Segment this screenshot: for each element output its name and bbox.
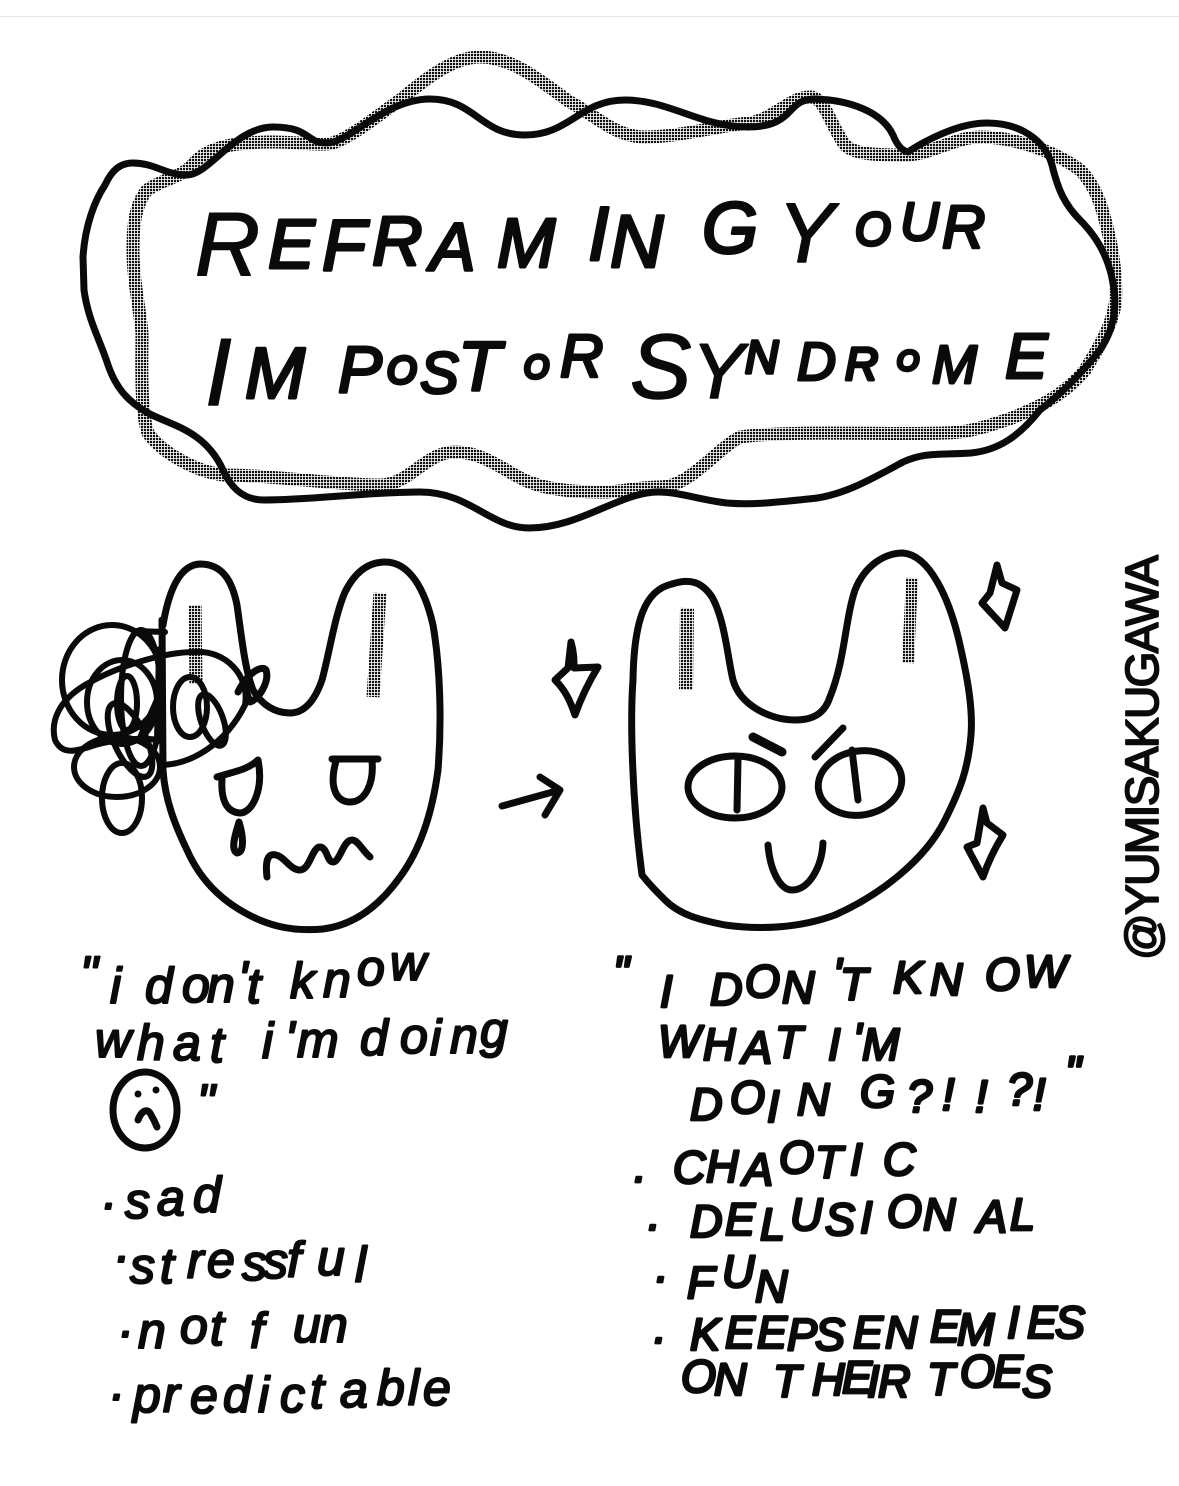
arrow between characters: [502, 777, 560, 815]
left list: ·not fun: [117, 1297, 348, 1359]
right quote: ": [613, 947, 631, 998]
left quote: [80, 935, 508, 1148]
left pupil: [737, 760, 738, 810]
hair scribble: [54, 625, 267, 833]
right list: ON THEIR TOES: [681, 1346, 1052, 1407]
title banner: cloud outlines with title: P: [338, 332, 382, 406]
head outline: [632, 553, 971, 928]
title text: N: [610, 200, 664, 283]
title banner: cloud outlines with title: N: [745, 331, 779, 383]
title text: R: [942, 194, 985, 261]
right quote: DOING?!!?!": [690, 1047, 1083, 1132]
right list: .CHAOTIC: [634, 1132, 916, 1195]
right list: .KEEPS ENEMIES: [654, 1297, 1085, 1360]
title banner: cloud outlines with title: [83, 57, 1116, 528]
sad face icon: [113, 1072, 177, 1148]
halftone cloud outline: [133, 57, 1116, 492]
right eyebrow: [815, 728, 843, 757]
left eyebrow: [753, 737, 782, 752]
title banner: cloud outlines with title: S: [630, 316, 691, 418]
left list: ·stressful: [113, 1228, 368, 1294]
title text: E: [268, 205, 316, 283]
ear shading: [686, 608, 687, 690]
wavy mouth: [266, 840, 370, 877]
right pupil: [852, 750, 858, 800]
right list: .FUN: [656, 1241, 788, 1312]
title text: M: [497, 204, 556, 282]
sparkle: bottom right: [967, 808, 1003, 877]
left list: ·predictable: [108, 1360, 451, 1424]
credit: vertical handle: @YUMISAKUGAWA: [1116, 555, 1168, 960]
right character: confident face: [632, 553, 971, 928]
left character: stressed face with scribble: [54, 562, 440, 930]
ear shading: [195, 605, 196, 684]
left list: [100, 1167, 451, 1424]
right list: [634, 1132, 1085, 1407]
solid cloud outline: [83, 99, 1115, 528]
title banner: cloud outlines with title: D: [797, 332, 836, 392]
left quote: what i'm doing: [95, 1002, 508, 1073]
right quote: WHAT I'M: [658, 1014, 900, 1073]
title banner: cloud outlines with title: R: [560, 323, 603, 390]
title text: O: [855, 203, 891, 255]
title banner: cloud outlines with title: M: [245, 334, 305, 414]
title banner: cloud outlines with title: R: [845, 338, 878, 390]
left quote: ": [197, 1074, 217, 1130]
smile: [768, 843, 823, 890]
title text: F: [322, 206, 370, 286]
title banner: cloud outlines with title: O: [387, 350, 417, 392]
crying eye: [217, 760, 260, 813]
sparkle: left: [555, 642, 598, 715]
title banner: cloud outlines with title: M: [932, 335, 977, 395]
title text: R: [372, 202, 423, 280]
sparkle: top right: [982, 565, 1017, 628]
title text: I: [588, 192, 609, 277]
title banner: cloud outlines with title: S: [420, 341, 459, 406]
title banner: cloud outlines with title: O: [524, 349, 549, 385]
left quote: "i don't know: [80, 935, 429, 1014]
title banner: cloud outlines with title: I: [205, 319, 232, 426]
head outline: [162, 562, 440, 930]
title text: A: [426, 209, 475, 285]
right eye: [813, 744, 907, 822]
right list: .DELUSIONAL: [648, 1186, 1035, 1250]
left eye: [688, 756, 782, 818]
title banner: cloud outlines with title: O: [897, 345, 919, 376]
title text: R: [195, 195, 260, 295]
left list: ·sad: [100, 1167, 223, 1231]
sad eye: [332, 759, 378, 802]
title text: G: [702, 189, 758, 269]
title banner: cloud outlines with title: E: [1005, 320, 1049, 392]
right quote: I DON'T KNOW: [660, 946, 1071, 1017]
title text: U: [900, 192, 940, 252]
title banner: cloud outlines with title: Y: [692, 327, 749, 415]
right quote: [613, 946, 1083, 1132]
title banner: cloud outlines with title: T: [458, 327, 505, 405]
title text: Y: [778, 186, 840, 280]
teardrop: [234, 822, 242, 853]
